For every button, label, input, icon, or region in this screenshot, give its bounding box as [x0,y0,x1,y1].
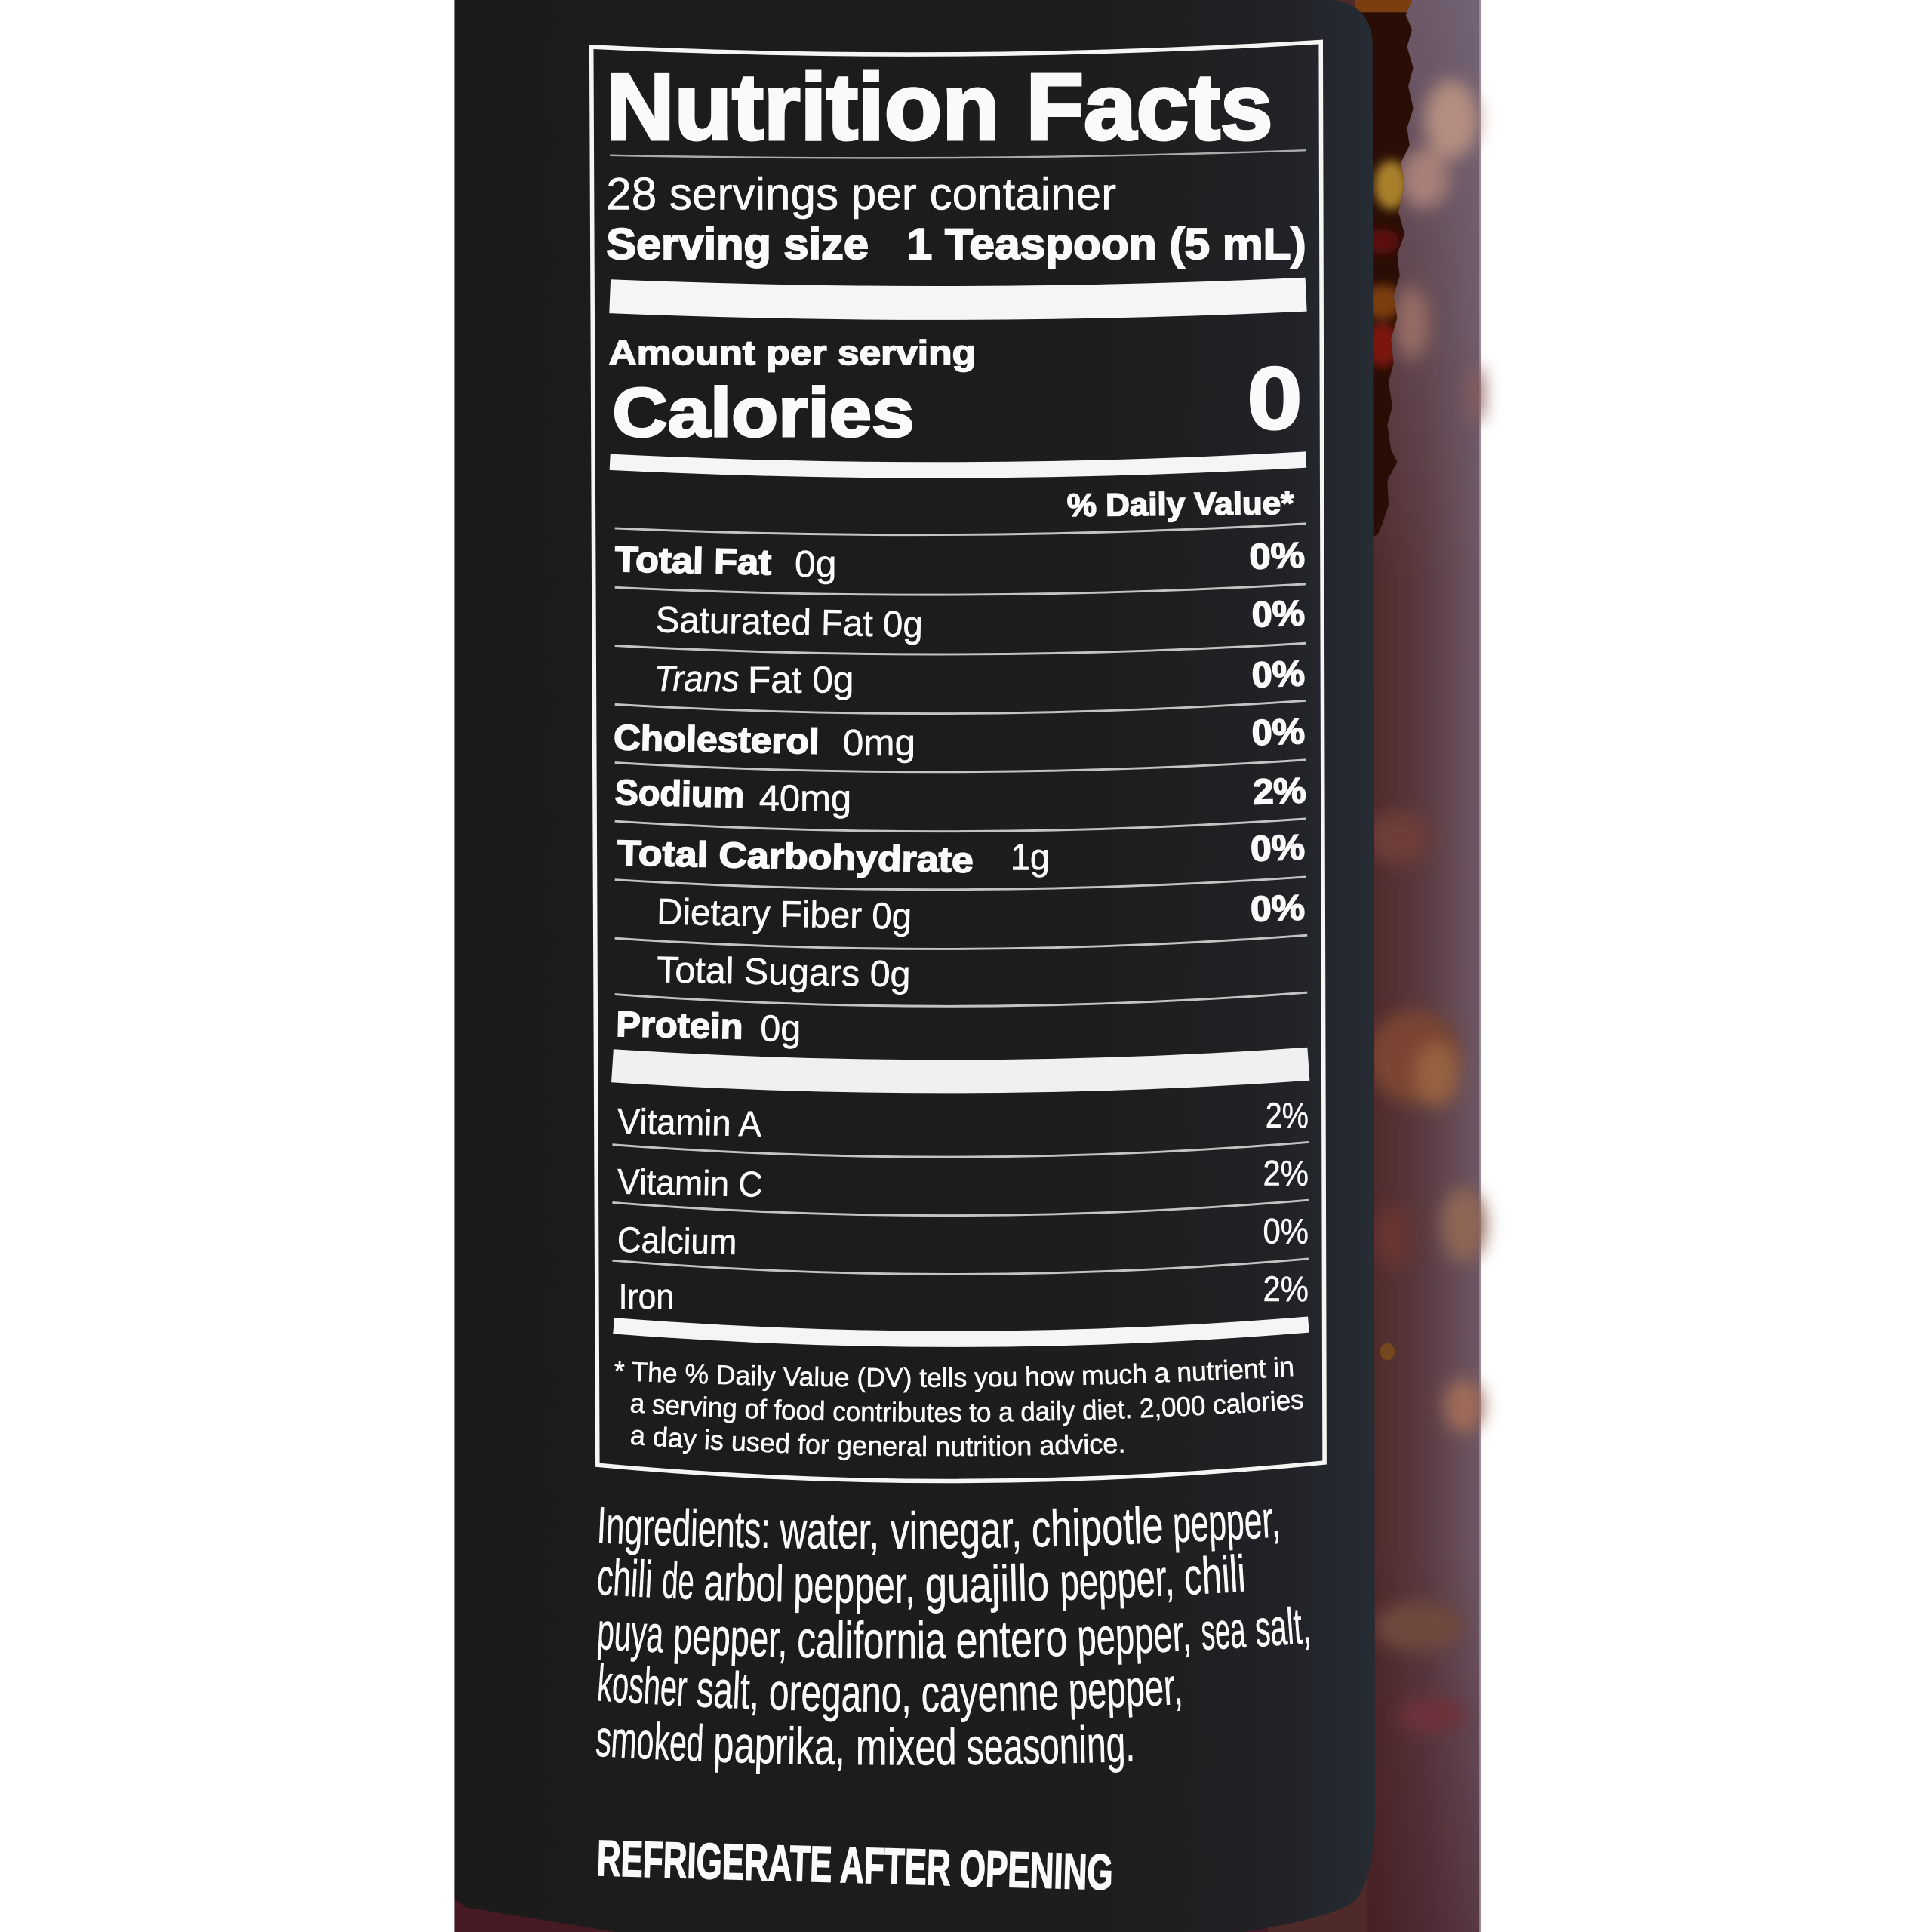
ingredients: smoked [594,1709,705,1773]
nutrient rows: Total Carbohydrate [617,833,974,881]
nutrient rows: Sodium [614,773,745,816]
ingredients: seasoning. [966,1715,1136,1776]
nutrient rows: Dietary Fiber 0g [657,892,912,937]
daily value header: % Daily Value* [1067,485,1294,523]
serving info [606,168,1306,269]
ingredients: pepper, [795,1574,912,1614]
ingredients: salt, [1253,1596,1312,1658]
serving info: 28 servings per container [606,168,1116,220]
nutrient rows: 0% [1250,827,1306,869]
title: Nutrition Facts [606,55,1273,159]
calories: 0 [1247,349,1303,448]
nutrient rows: 2% [1252,771,1306,813]
vitamins and minerals: 2% [1263,1154,1309,1194]
nutrient rows: Total Fat [614,540,772,583]
nutrient rows: Fat 0g [748,660,854,701]
ingredients: entero [957,1623,1066,1659]
nutrient rows [614,535,1306,1050]
footnote: a day is used for general nutrition advice. [631,1426,1124,1461]
ingredients: pepper, [1079,1623,1189,1666]
vitamins and minerals: 0% [1263,1211,1309,1251]
nutrient rows: 1g [1011,838,1050,878]
ingredients: kosher [595,1654,688,1717]
nutrient rows: 0% [1251,593,1306,635]
nutrient rows: Total Sugars 0g [657,949,911,995]
ingredients: de [663,1561,693,1600]
vitamins and minerals: Calcium [617,1220,737,1263]
nutrient rows: Cholesterol [614,718,820,762]
vitamins and minerals: Iron [619,1277,674,1317]
footnote [614,1351,1305,1462]
ingredients: oregano, [768,1663,912,1723]
nutrient rows: Saturated Fat 0g [655,599,923,645]
ingredients: vinegar, [891,1511,1019,1559]
ingredients: pepper, [1174,1509,1278,1553]
calories [609,334,1303,451]
nutrition facts panel [592,42,1324,1481]
ingredients: chili [598,1558,652,1598]
ingredients: pepper, [1067,1657,1184,1720]
calories: Calories [612,374,914,451]
nutrient rows: 0g [795,544,837,585]
nutrient rows: 0% [1251,712,1306,753]
nutrient rows: Trans [654,659,740,700]
ingredients: puya [598,1621,663,1662]
floating flake [1380,1343,1395,1360]
footnote: a serving of food contributes to a daily diet. 2,000 calories [631,1390,1303,1426]
nutrient rows: Protein [616,1004,743,1047]
serving info: 1 Teaspoon (5 mL) [907,220,1306,269]
ingredients: chili [1185,1553,1244,1595]
nutrient rows: 0g [760,1009,801,1050]
dark sauce band [1355,0,1417,542]
nutrient rows: 0mg [843,723,915,764]
ingredients: mixed [856,1718,957,1776]
panel border [592,42,1324,1481]
ingredients [594,1490,1312,1776]
pepper seeds [1367,80,1486,1733]
vitamins and minerals: 2% [1263,1269,1309,1309]
table rules [612,524,1309,1274]
vitamins and minerals: Vitamin A [617,1102,762,1145]
nutrient rows: 0% [1249,535,1306,577]
ingredients: Ingredients: [599,1506,768,1555]
ingredients: guajillo [927,1563,1048,1614]
ingredients: pepper, [1061,1567,1173,1611]
footnote: * The % Daily Value (DV) tells you how much a nutrient in [614,1357,1294,1393]
label background [454,0,1375,1932]
serving info: Serving size [606,220,869,269]
ingredients: chipotle [1032,1506,1162,1556]
ingredients: pepper, [675,1626,785,1666]
ingredients: california [798,1620,946,1659]
vitamins and minerals: 2% [1266,1096,1309,1136]
calories: Amount per serving [609,334,976,372]
ingredients: paprika, [712,1715,845,1776]
nutrient rows: 0% [1251,654,1306,696]
bottle contents [454,0,1486,1932]
nutrient rows: 0% [1250,888,1306,930]
vitamins and minerals [617,1096,1309,1317]
ingredients: salt, [695,1660,761,1720]
ingredients: arbol [705,1562,782,1602]
ingredients: sea [1201,1620,1247,1650]
ingredients: cayenne [921,1663,1060,1723]
refrigerate notice: REFRIGERATE AFTER OPENING [596,1830,1114,1901]
vitamins and minerals: Vitamin C [617,1162,763,1205]
nutrient rows: 40mg [759,778,851,819]
ingredients: water, [780,1515,876,1555]
